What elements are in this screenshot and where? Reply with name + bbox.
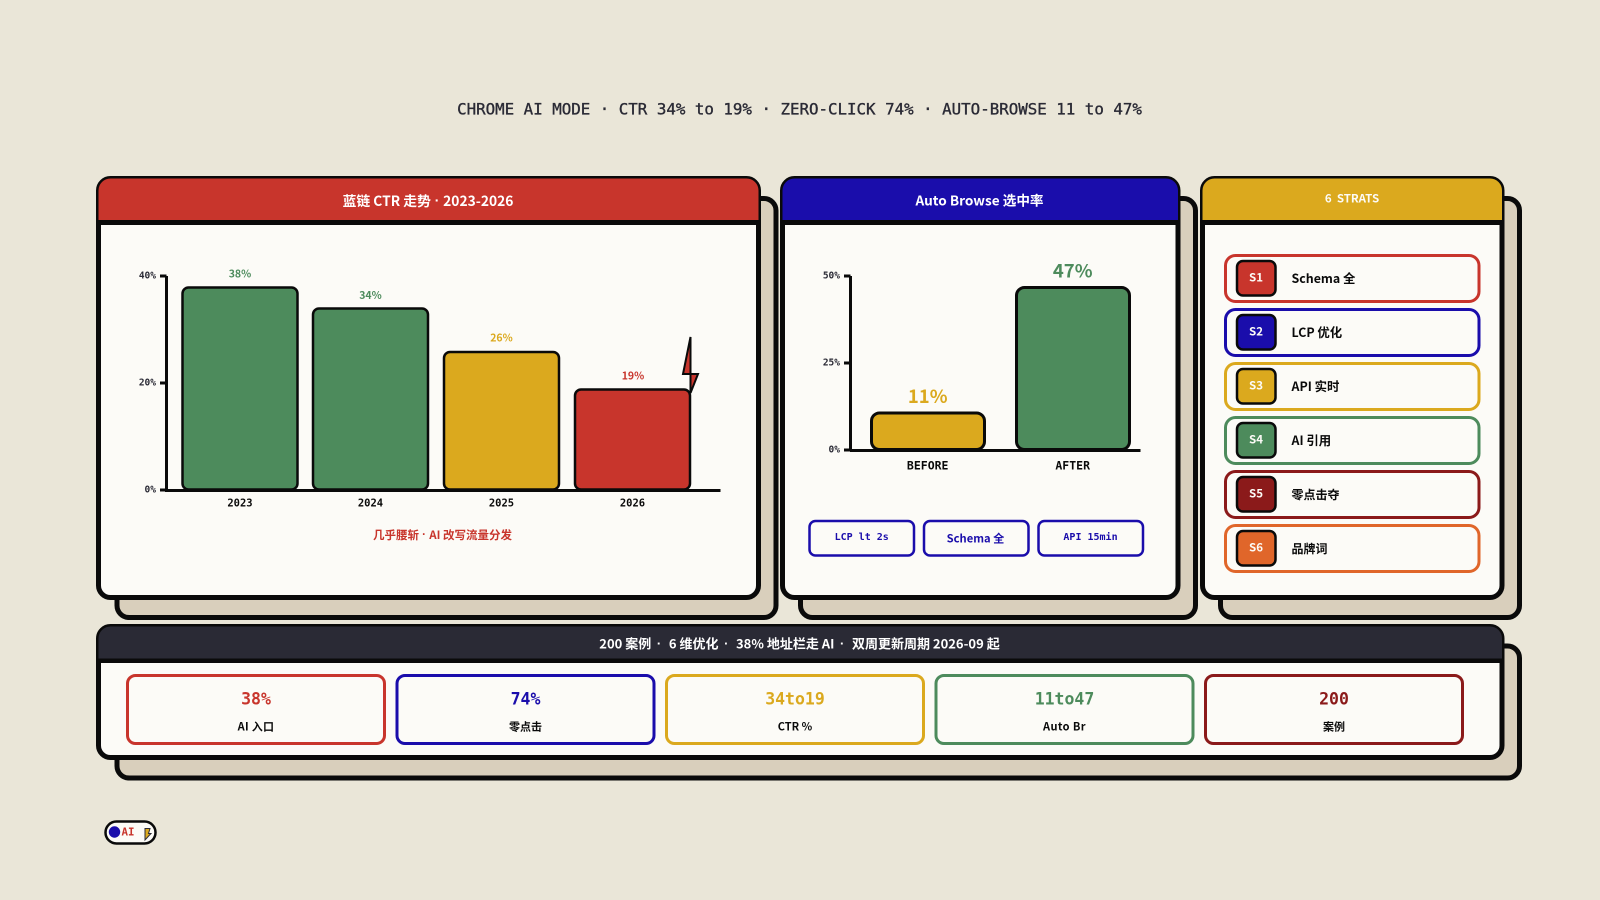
bar 2024 [313, 288, 428, 510]
strategy S3: API 实时 [1290, 377, 1340, 395]
axes [844, 276, 1140, 451]
panel header [98, 626, 1502, 659]
bar 2026: 2026 [620, 498, 645, 510]
panel body [782, 178, 1178, 598]
strategy S2: LCP 优化 [1292, 323, 1343, 341]
panel shadow [117, 646, 1520, 778]
pill: LCP [810, 521, 914, 556]
stat: 11to47: 11to47 [1035, 690, 1094, 708]
strategy S3 [1226, 364, 1479, 410]
stat: 74% [397, 676, 654, 744]
pill: API [1038, 521, 1143, 556]
panel body [98, 178, 758, 598]
stat: 200: 案例 [1323, 719, 1345, 735]
y axis labels [139, 270, 156, 496]
bar 2026: 19% [622, 368, 644, 384]
panel: Auto Browse [782, 178, 1196, 618]
badge: AI mark [106, 822, 156, 844]
pill: API: API 15min [1063, 531, 1118, 543]
bar 2023: 2023 [227, 498, 253, 510]
stat: 38%: AI 入口 [237, 719, 274, 735]
strategy S1 [1226, 256, 1479, 302]
strategy S6: S6 [1249, 539, 1263, 555]
y axis labels: 25% [823, 358, 840, 368]
bar before [872, 383, 984, 472]
AI label: AI [121, 826, 135, 838]
bar after [1016, 258, 1130, 472]
stat: 200: 200 [1319, 690, 1349, 708]
panel shadow [800, 198, 1196, 618]
strategy S2 [1226, 310, 1479, 356]
stat: 34to19 [666, 676, 924, 744]
strategy S6 [1226, 526, 1479, 572]
panel: summary strip [98, 626, 1520, 778]
y axis labels [823, 270, 840, 456]
panel header [782, 178, 1178, 220]
panel body [98, 626, 1502, 758]
strategy S4: AI 引用 [1290, 431, 1331, 449]
bar 2023 [182, 266, 298, 510]
panel heading: 6 STRATS [1325, 190, 1379, 206]
bar 2023: 38% [229, 266, 251, 282]
panel body [1202, 178, 1502, 598]
bar after: 47% [1053, 258, 1093, 284]
strategy S1: S1 [1249, 269, 1263, 285]
bar after: AFTER [1055, 458, 1090, 472]
subtitle: CHROME AI MODE · CTR 34% to 19% · ZERO-CLICK 74% · AUTO-BROWSE 11 to 47% [457, 100, 1142, 118]
panel: 6 strategies [1202, 178, 1520, 618]
pill: Schema [924, 521, 1028, 556]
pill: Schema: Schema 全 [947, 530, 1005, 546]
panel heading: Auto Browse 选中率 [914, 189, 1044, 209]
stat: 74%: 零点击 [509, 719, 542, 735]
bar 2024: 34% [359, 288, 382, 303]
icon: lightning bolt [683, 337, 698, 393]
stat: 11to47 [936, 676, 1193, 744]
bar 2026 [575, 368, 690, 510]
stat: 38%: 38% [241, 690, 271, 708]
y axis labels: 20% [139, 378, 156, 388]
bar before: 11% [908, 383, 948, 409]
bar 2025 [444, 330, 559, 510]
blue dot [109, 826, 120, 838]
bar 2025: 2025 [489, 498, 514, 510]
stat: 11to47: Auto Br [1042, 719, 1086, 735]
stat: 34to19: CTR % [778, 719, 813, 735]
stat: 34to19: 34to19 [765, 690, 825, 708]
axes [160, 276, 720, 491]
panel heading: 蓝链 CTR 走势 · 2023-2026 [343, 190, 513, 210]
strategy S4 [1226, 418, 1479, 464]
panel shadow [117, 198, 776, 618]
panel: CTR trend [98, 178, 776, 618]
strategy S1: Schema 全 [1292, 269, 1356, 287]
strategy S6: 品牌词 [1292, 540, 1328, 557]
panel header [98, 178, 758, 220]
panel header [1202, 178, 1502, 220]
y axis labels: 0% [829, 444, 840, 456]
strategy S4: S4 [1249, 431, 1263, 447]
y axis labels: 50% [823, 270, 840, 282]
panel heading: 200 案例 · 6 维优化 · 38% 地址栏走 AI · 双周更新周期 2026-09 起 [599, 634, 1000, 652]
bar before: BEFORE [907, 458, 949, 472]
icon: small bolt [145, 828, 151, 840]
panel shadow [1220, 198, 1520, 618]
strategy S5: 零点击夺 [1292, 486, 1340, 503]
strategy S5 [1226, 472, 1479, 518]
stat: 74%: 74% [511, 690, 540, 708]
bar 2024: 2024 [358, 498, 383, 510]
strategy S3: S3 [1249, 377, 1263, 393]
y axis labels: 0% [145, 484, 156, 496]
stat: 200 [1206, 676, 1462, 744]
stat: 38% [128, 676, 384, 744]
pill: LCP: LCP lt 2s [835, 532, 889, 543]
chart caption: 几乎腰斩 · AI 改写流量分发 [373, 527, 513, 543]
strategy S5: S5 [1249, 485, 1263, 501]
y axis labels: 40% [139, 270, 156, 282]
bar 2025: 26% [490, 330, 513, 346]
strategy S2: S2 [1249, 323, 1263, 339]
